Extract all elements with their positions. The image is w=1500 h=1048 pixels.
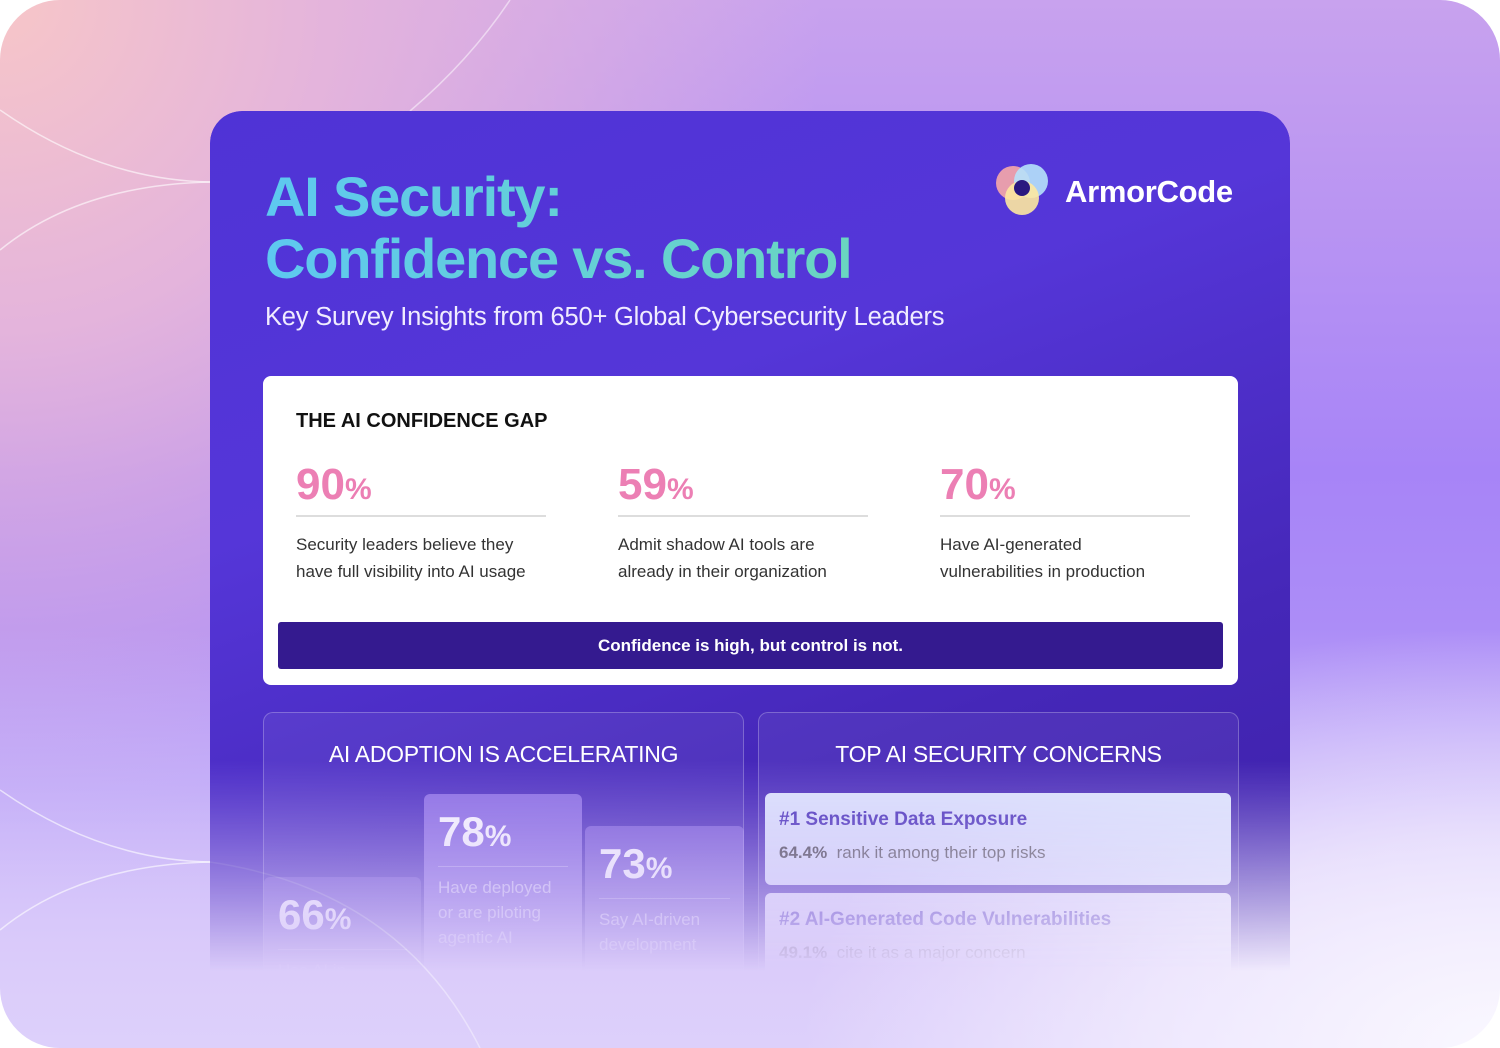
bar 78: 78%: [438, 808, 511, 855]
stat 70: [940, 468, 1190, 580]
title: Confidence vs. Control: [265, 227, 852, 290]
heading: THE AI CONFIDENCE GAP: [296, 410, 548, 432]
panel: adoption: [263, 712, 744, 954]
concern 2: #2 AI-Generated Code Vulnerabilities: [779, 909, 1111, 930]
callout band: [278, 622, 1223, 669]
stat 59: Admit shadow AI tools are: [618, 535, 815, 554]
logo: [996, 164, 1232, 215]
stat 59: 59%: [618, 460, 694, 509]
stat 90: 90%: [296, 460, 372, 509]
heading: AI ADOPTION IS ACCELERATING: [329, 741, 678, 767]
title: [266, 176, 849, 278]
subtitle: Key Survey Insights from 650+ Global Cybersecurity Leaders: [265, 303, 944, 331]
bar 73: 73%: [599, 840, 672, 887]
stat 90: [296, 468, 546, 580]
bar 73: Say AI-driven development: [599, 910, 700, 954]
concern 1: 64.4% rank it among their top risks: [779, 843, 1045, 862]
heading: TOP AI SECURITY CONCERNS: [835, 741, 1162, 767]
bar 66: 66%: [278, 891, 351, 938]
logo text: ArmorCode: [1065, 174, 1233, 209]
stat 70: 70%: [940, 460, 1016, 509]
stat 59: [618, 468, 868, 580]
title: AI Security:: [265, 165, 562, 228]
panel: concerns: [758, 712, 1239, 962]
stat 59: already in their organization: [618, 562, 827, 581]
bar 78: Have deployed or are piloting agentic AI: [438, 878, 551, 947]
concern 1: #1 Sensitive Data Exposure: [779, 809, 1027, 830]
stat 70: vulnerabilities in production: [940, 562, 1145, 581]
stat 90: Security leaders believe they have full visibility into AI usage: [296, 535, 526, 581]
callout band: Confidence is high, but control is not.: [598, 636, 903, 655]
icon: logo circles: [996, 164, 1048, 215]
stat 70: Have AI-generated: [940, 535, 1082, 554]
concern 2: [765, 893, 1231, 962]
panel: confidence gap: [263, 376, 1238, 685]
bar 73: [585, 826, 744, 954]
concern 2: 49.1% cite it as a major concern: [779, 943, 1026, 962]
bar 66: [264, 877, 421, 950]
main card: [210, 111, 1290, 971]
bar 78: [424, 794, 582, 946]
concern 1: [765, 793, 1231, 885]
